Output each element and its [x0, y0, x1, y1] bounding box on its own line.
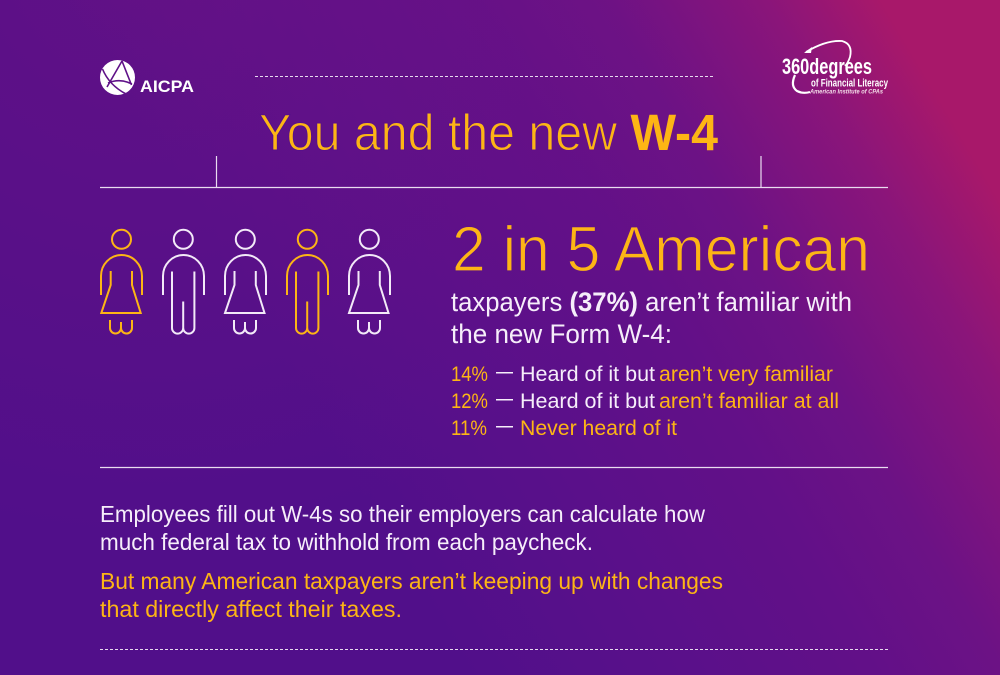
logo: AICPA: [100, 60, 194, 96]
row: 11%: 11%: [451, 417, 487, 440]
headline statistic: 2 in 5 American: [452, 213, 870, 285]
row: 14%: aren’t very familiar: [659, 363, 833, 386]
row: 14%: 14%: [451, 363, 488, 386]
breakdown list: [451, 363, 839, 440]
row: 14%: [451, 363, 833, 386]
row: 12%: [451, 390, 839, 413]
statistic description: taxpayers (37%) aren’t familiar with: [451, 287, 852, 317]
row: 12%: Heard of it but: [520, 390, 655, 413]
logo: 360 degrees of Financial Literacy: of Financial Literacy: [811, 78, 889, 90]
title bracket rule: [100, 156, 888, 188]
icon: woman: [225, 230, 266, 334]
explanation text: much federal tax to withhold from each paycheck.: [100, 529, 593, 555]
pictogram: five people, two highlighted: [101, 230, 390, 334]
logo: 360 degrees of Financial Literacy: 360degrees: [782, 54, 872, 79]
icon: woman (highlighted): [101, 230, 142, 334]
icon: man (highlighted): [287, 230, 328, 334]
logo: 360 degrees of Financial Literacy: American Institute of CPAs: [809, 88, 883, 96]
closing highlight text: [100, 568, 723, 622]
icon: woman: [349, 230, 390, 334]
row: 14%: Heard of it but: [520, 363, 655, 386]
statistic description: [451, 287, 852, 349]
row: 11%: Never heard of it: [520, 417, 677, 440]
bottom dashed rule: [100, 648, 888, 650]
closing highlight text: that directly affect their taxes.: [100, 596, 402, 622]
logo: 360 degrees of Financial Literacy: [782, 41, 889, 96]
closing highlight text: But many American taxpayers aren’t keeping up with changes: [100, 568, 723, 594]
row: 12%: 12%: [451, 390, 488, 413]
top dashed rule: [255, 76, 713, 78]
logo: AICPA: AICPA: [140, 77, 194, 96]
statistic description: the new Form W-4:: [451, 319, 672, 349]
row: 12%: aren’t familiar at all: [659, 390, 839, 413]
section divider: [100, 466, 888, 468]
explanation text: [100, 501, 706, 555]
explanation text: Employees fill out W-4s so their employers can calculate how: [100, 501, 706, 527]
title: You and the new W-4: [259, 104, 719, 161]
icon: man: [163, 230, 204, 334]
row: 11%: [451, 417, 677, 440]
